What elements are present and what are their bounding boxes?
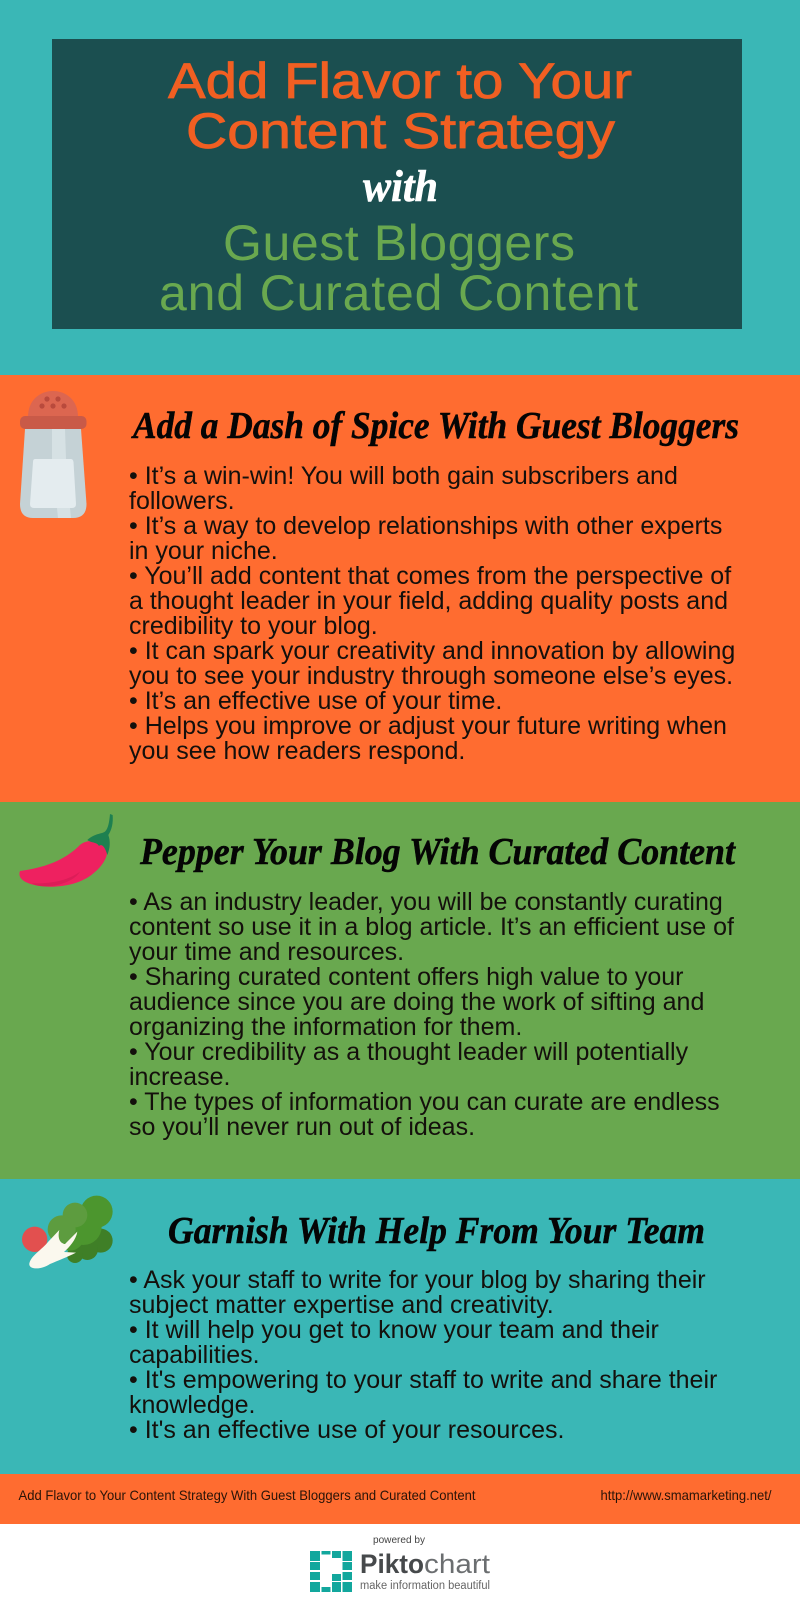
text block: guest blogger bullets: • It can spark your creativity and innovation by allowing [129,637,735,665]
heading: with: with [363,162,438,211]
panel: guest bloggers [0,375,800,802]
panel: title background [0,0,800,375]
text block: guest blogger bullets: in your niche. [129,537,278,565]
icon: salt shaker [20,391,86,518]
text block: curated content bullets: so you’ll never run out of ideas. [129,1113,475,1141]
icon: piktochart logo [310,1551,352,1592]
text block: team bullets: knowledge. [129,1391,255,1419]
panel: curated content [0,802,800,1179]
wordmark: Pikto [360,1549,424,1579]
heading: subtitle: Guest Bloggers [223,215,575,271]
text block: curated content bullets: • Your credibility as a thought leader will potentially [129,1038,689,1066]
text block: curated content bullets: content so use it in a blog article. It’s an efficient use of [129,913,734,941]
wordmark light: chart [424,1549,491,1579]
heading: garnish: Garnish With Help From Your Team [168,1210,705,1252]
heading: main title [168,53,632,159]
text block: team bullets: • It will help you get to know your team and their [129,1316,659,1344]
powered by: powered by [373,1534,426,1546]
text block: curated content bullets: organizing the information for them. [129,1013,522,1041]
tagline: make information beautiful [360,1580,490,1592]
text block: curated content bullets: • The types of information you can curate are endless [129,1088,720,1116]
text block: team bullets: subject matter expertise and creativity. [129,1291,554,1319]
text block: curated content bullets: audience since you are doing the work of sifting and [129,988,704,1016]
panel: team [0,1179,800,1474]
panel: title box [52,39,742,329]
text block: guest blogger bullets: credibility to your blog. [129,612,378,640]
heading: main title: Content Strategy [186,103,615,159]
text block: guest blogger bullets: • It’s a win-win! You will both gain subscribers and [129,462,678,490]
text block: curated content bullets: • Sharing curated content offers high value to your [129,963,683,991]
heading: main title: Add Flavor to Your [168,53,632,109]
heading: subtitle: and Curated Content [159,265,638,321]
text block: guest blogger bullets: followers. [129,487,235,515]
text block: guest blogger bullets [129,462,735,765]
text block: team bullets: • Ask your staff to write for your blog by sharing their [129,1266,706,1294]
text block: team bullets: capabilities. [129,1341,260,1369]
heading: subtitle [159,215,638,321]
icon: garnish greens [22,1196,113,1268]
heading: dash of spice: Add a Dash of Spice With Guest Bloggers [131,405,739,447]
footer title: Add Flavor to Your Content Strategy With Guest Bloggers and Curated Content [18,1487,476,1503]
text block: guest blogger bullets: you to see your industry through someone else’s eyes. [129,662,733,690]
icon: chili pepper [19,814,113,887]
text block: team bullets [129,1266,717,1444]
text block: guest blogger bullets: • You’ll add content that comes from the perspective of [129,562,731,590]
text block: guest blogger bullets: • Helps you improve or adjust your future writing when [129,712,727,740]
panel: piktochart branding [0,1524,800,1604]
text block: guest blogger bullets: • It’s an effective use of your time. [129,687,502,715]
heading: pepper your blog: Pepper Your Blog With Curated Content [139,831,736,873]
text block: guest blogger bullets: you see how readers respond. [129,737,465,765]
text block: guest blogger bullets: a thought leader in your field, adding quality posts and [129,587,728,615]
text block: guest blogger bullets: • It’s a way to develop relationships with other experts [129,512,722,540]
panel: footer [0,1474,800,1524]
text block: curated content bullets: your time and resources. [129,938,404,966]
text block: team bullets: • It's empowering to your staff to write and share their [129,1366,717,1394]
text block: curated content bullets: increase. [129,1063,230,1091]
footer url: http://www.smamarketing.net/ [600,1487,772,1503]
text block: team bullets: • It's an effective use of your resources. [129,1416,564,1444]
text block: curated content bullets: • As an industry leader, you will be constantly curating [129,888,723,916]
text block: curated content bullets [129,888,734,1141]
